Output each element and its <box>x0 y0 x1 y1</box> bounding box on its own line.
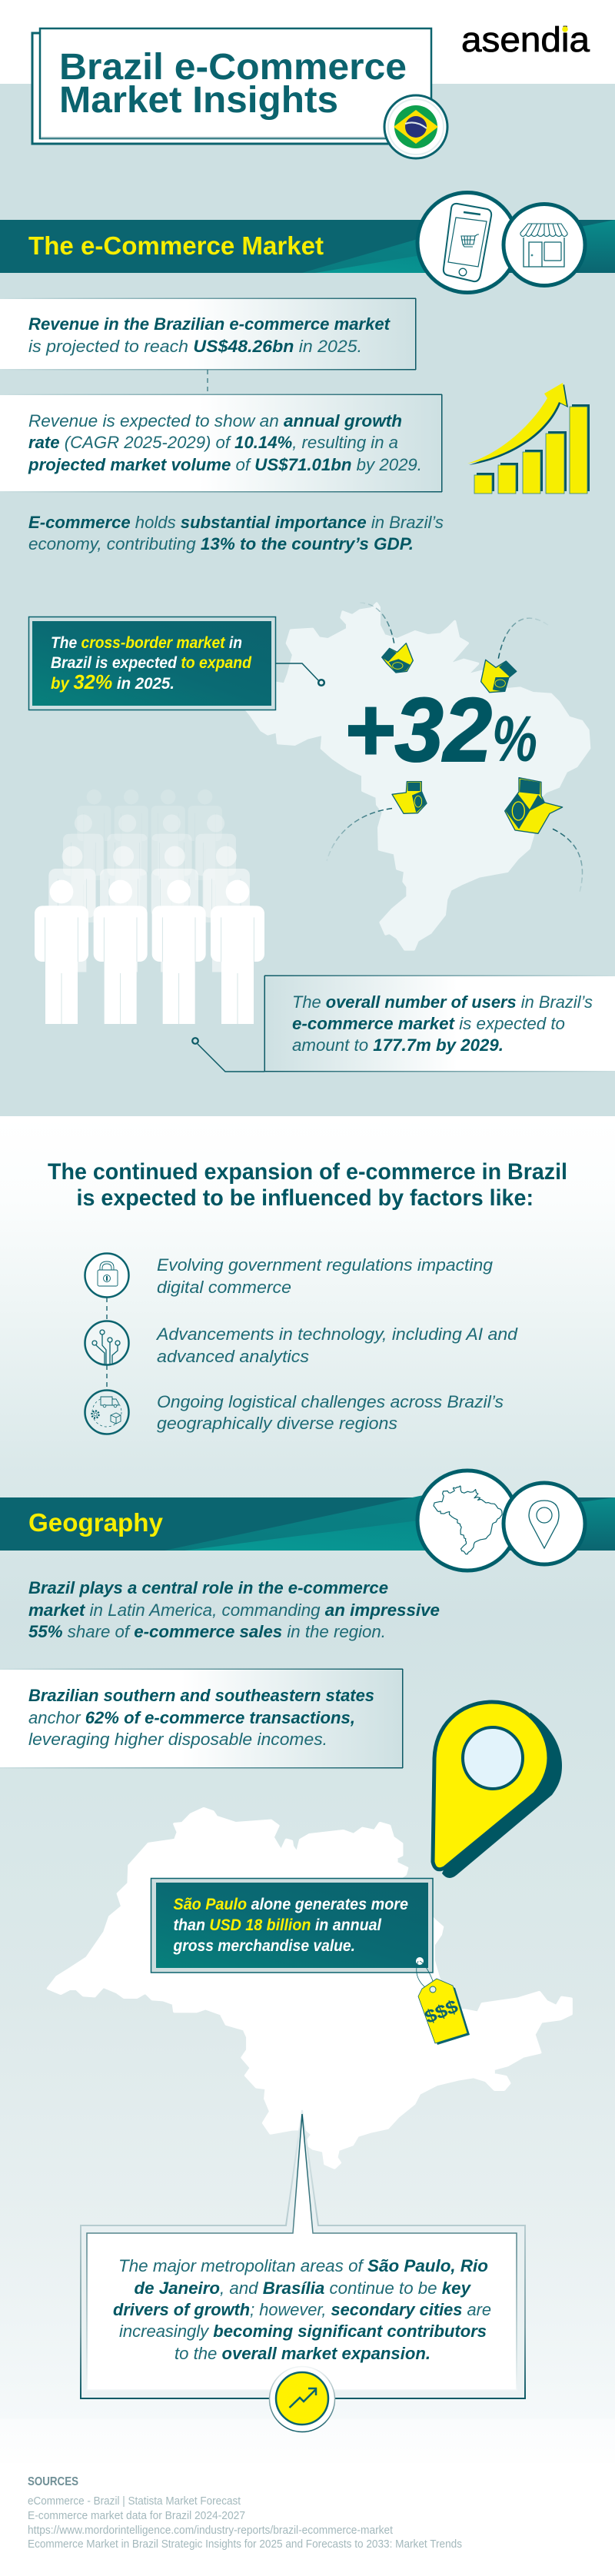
heading: factors: is expected to be influenced by factors like: <box>77 1185 534 1211</box>
text: factor list: Advancements in technology, including AI and <box>155 1325 518 1344</box>
sources: Ecommerce Market in Brazil Strategic Insights for 2025 and Forecasts to 2033: Market Trends <box>28 2538 462 2551</box>
panel: number of users: e-commerce market is expected to <box>292 1014 565 1033</box>
panel: metropolitan areas callout: drivers of growth; however, secondary cities are <box>113 2300 491 2319</box>
icon: price tag: $$$ <box>422 1996 461 2028</box>
panel: cross-border market: by 32% in 2025. <box>51 670 175 693</box>
panel: metropolitan areas callout: increasingly becoming significant contributors <box>119 2322 487 2341</box>
section band: Geography: Geography <box>28 1508 164 1537</box>
sources <box>28 2475 462 2551</box>
panel: annual growth rate: rate (CAGR 2025-2029) of 10.14%, resulting in a <box>28 433 398 452</box>
icon: growth trend badge <box>269 2366 335 2432</box>
big number: +32%: % <box>492 703 537 775</box>
icon: price tag <box>416 1957 470 2045</box>
panel: metropolitan areas callout <box>81 2110 525 2398</box>
icon: smartphone with cart <box>417 192 517 292</box>
text: central role in Latin America: 55% share of e-commerce sales in the region. <box>28 1622 386 1641</box>
text: factor list: Ongoing logistical challenges across Brazil’s <box>157 1392 504 1411</box>
icon: padlock <box>85 1253 129 1298</box>
panel: southern and southeastern states: leveraging higher disposable incomes. <box>28 1730 327 1749</box>
title panel <box>32 28 431 144</box>
text: factor list: advanced analytics <box>157 1347 309 1366</box>
panel: metropolitan areas callout: to the overall market expansion. <box>175 2344 430 2363</box>
icon: shipping box 4 <box>505 778 563 833</box>
sources: https://www.mordorintelligence.com/industry-reports/brazil-ecommerce-market <box>28 2524 394 2537</box>
text: central role in Latin America: Brazil plays a central role in the e-commerce <box>28 1578 388 1597</box>
panel: cross-border market: Brazil is expected to expand <box>51 654 252 672</box>
panel: southern and southeastern states <box>0 1668 403 1768</box>
panel: metropolitan areas callout: de Janeiro, and Brasília continue to be key <box>134 2279 472 2298</box>
map: southern and southeastern Brazil <box>48 1809 571 2168</box>
icon: Brazil outline <box>417 1471 517 1571</box>
icon: growth bar chart with arrow <box>467 383 590 494</box>
panel: revenue 2025 <box>0 298 417 371</box>
panel: revenue 2025: is projected to reach US$48.26bn in 2025. <box>28 337 362 356</box>
panel: annual growth rate <box>0 394 443 492</box>
text: factor list: Evolving government regulations impacting <box>157 1255 494 1275</box>
panel: number of users: The overall number of users in Brazil’s <box>292 992 593 1012</box>
panel: number of users <box>264 975 615 1072</box>
section band: The e-Commerce Market <box>0 220 615 273</box>
panel: metropolitan areas callout: The major metropolitan areas of São Paulo, Rio <box>118 2256 488 2275</box>
heading: factors <box>48 1159 567 1211</box>
text: factor list <box>155 1255 518 1433</box>
text: GDP contribution: E-commerce holds substantial importance in Brazil’s <box>28 513 444 532</box>
panel: revenue 2025: Revenue in the Brazilian e-commerce market <box>28 314 391 334</box>
panel: São Paulo: São Paulo alone generates more <box>174 1896 408 1913</box>
panel: annual growth rate: projected market volume of US$71.01bn by 2029. <box>28 455 422 474</box>
dashed connector between factor icons <box>106 1298 108 1390</box>
map: Brazil with shipping boxes <box>242 603 590 949</box>
text: GDP contribution <box>28 513 444 553</box>
icon: storefront <box>504 204 585 286</box>
title panel: Market Insights <box>59 80 338 121</box>
sources: E-commerce market data for Brazil 2024-2027 <box>28 2509 245 2522</box>
text: GDP contribution: economy, contributing 13% to the country’s GDP. <box>28 534 414 553</box>
icon: logistics <box>85 1390 129 1434</box>
panel: cross-border market <box>29 617 275 710</box>
icon: crowd of users <box>35 789 264 1024</box>
panel: São Paulo: gross merchandise value. <box>173 1937 355 1955</box>
icon: shipping box 1 <box>382 643 413 673</box>
heading: factors: The continued expansion of e-commerce in Brazil <box>48 1159 567 1185</box>
panel: São Paulo: than USD 18 billion in annual <box>174 1916 382 1934</box>
text: central role in Latin America: market in Latin America, commanding an impressive <box>28 1600 440 1620</box>
title panel: Brazil e-Commerce <box>59 47 407 88</box>
panel: southern and southeastern states: Brazilian southern and southeastern states <box>28 1686 374 1705</box>
icon: shipping box 3 <box>392 782 427 813</box>
panel: cross-border market: The cross-border market in <box>51 634 242 652</box>
panel: southern and southeastern states: anchor 62% of e-commerce transactions, <box>28 1708 355 1727</box>
icon: shipping box 2 <box>481 660 517 693</box>
icon: map pin outline <box>504 1483 585 1564</box>
dashed arc routes <box>327 603 583 894</box>
icon: large yellow map pin <box>433 1702 562 1878</box>
connector: cross-border callout to map <box>275 663 324 686</box>
icon: Brazil flag <box>384 95 447 158</box>
text: central role in Latin America <box>28 1578 440 1641</box>
text: factor list: digital commerce <box>157 1278 291 1297</box>
sources: SOURCES <box>28 2475 78 2488</box>
panel: number of users: amount to 177.7m by 2029. <box>292 1035 504 1055</box>
panel: São Paulo <box>151 1879 433 1973</box>
section band: The e-Commerce Market: The e-Commerce Market <box>28 231 324 260</box>
dashed connector <box>207 370 208 394</box>
panel: annual growth rate: Revenue is expected to show an annual growth <box>28 411 402 430</box>
icon: circuit nodes <box>85 1321 129 1365</box>
logo: asendia: asendia <box>461 20 590 59</box>
connector: users callout to crowd <box>192 1038 264 1072</box>
text: factor list: geographically diverse regions <box>157 1414 397 1433</box>
big number: +32%: +32 <box>344 680 492 781</box>
section band: Geography <box>0 1494 615 1551</box>
sources: eCommerce - Brazil | Statista Market Forecast <box>28 2495 241 2508</box>
